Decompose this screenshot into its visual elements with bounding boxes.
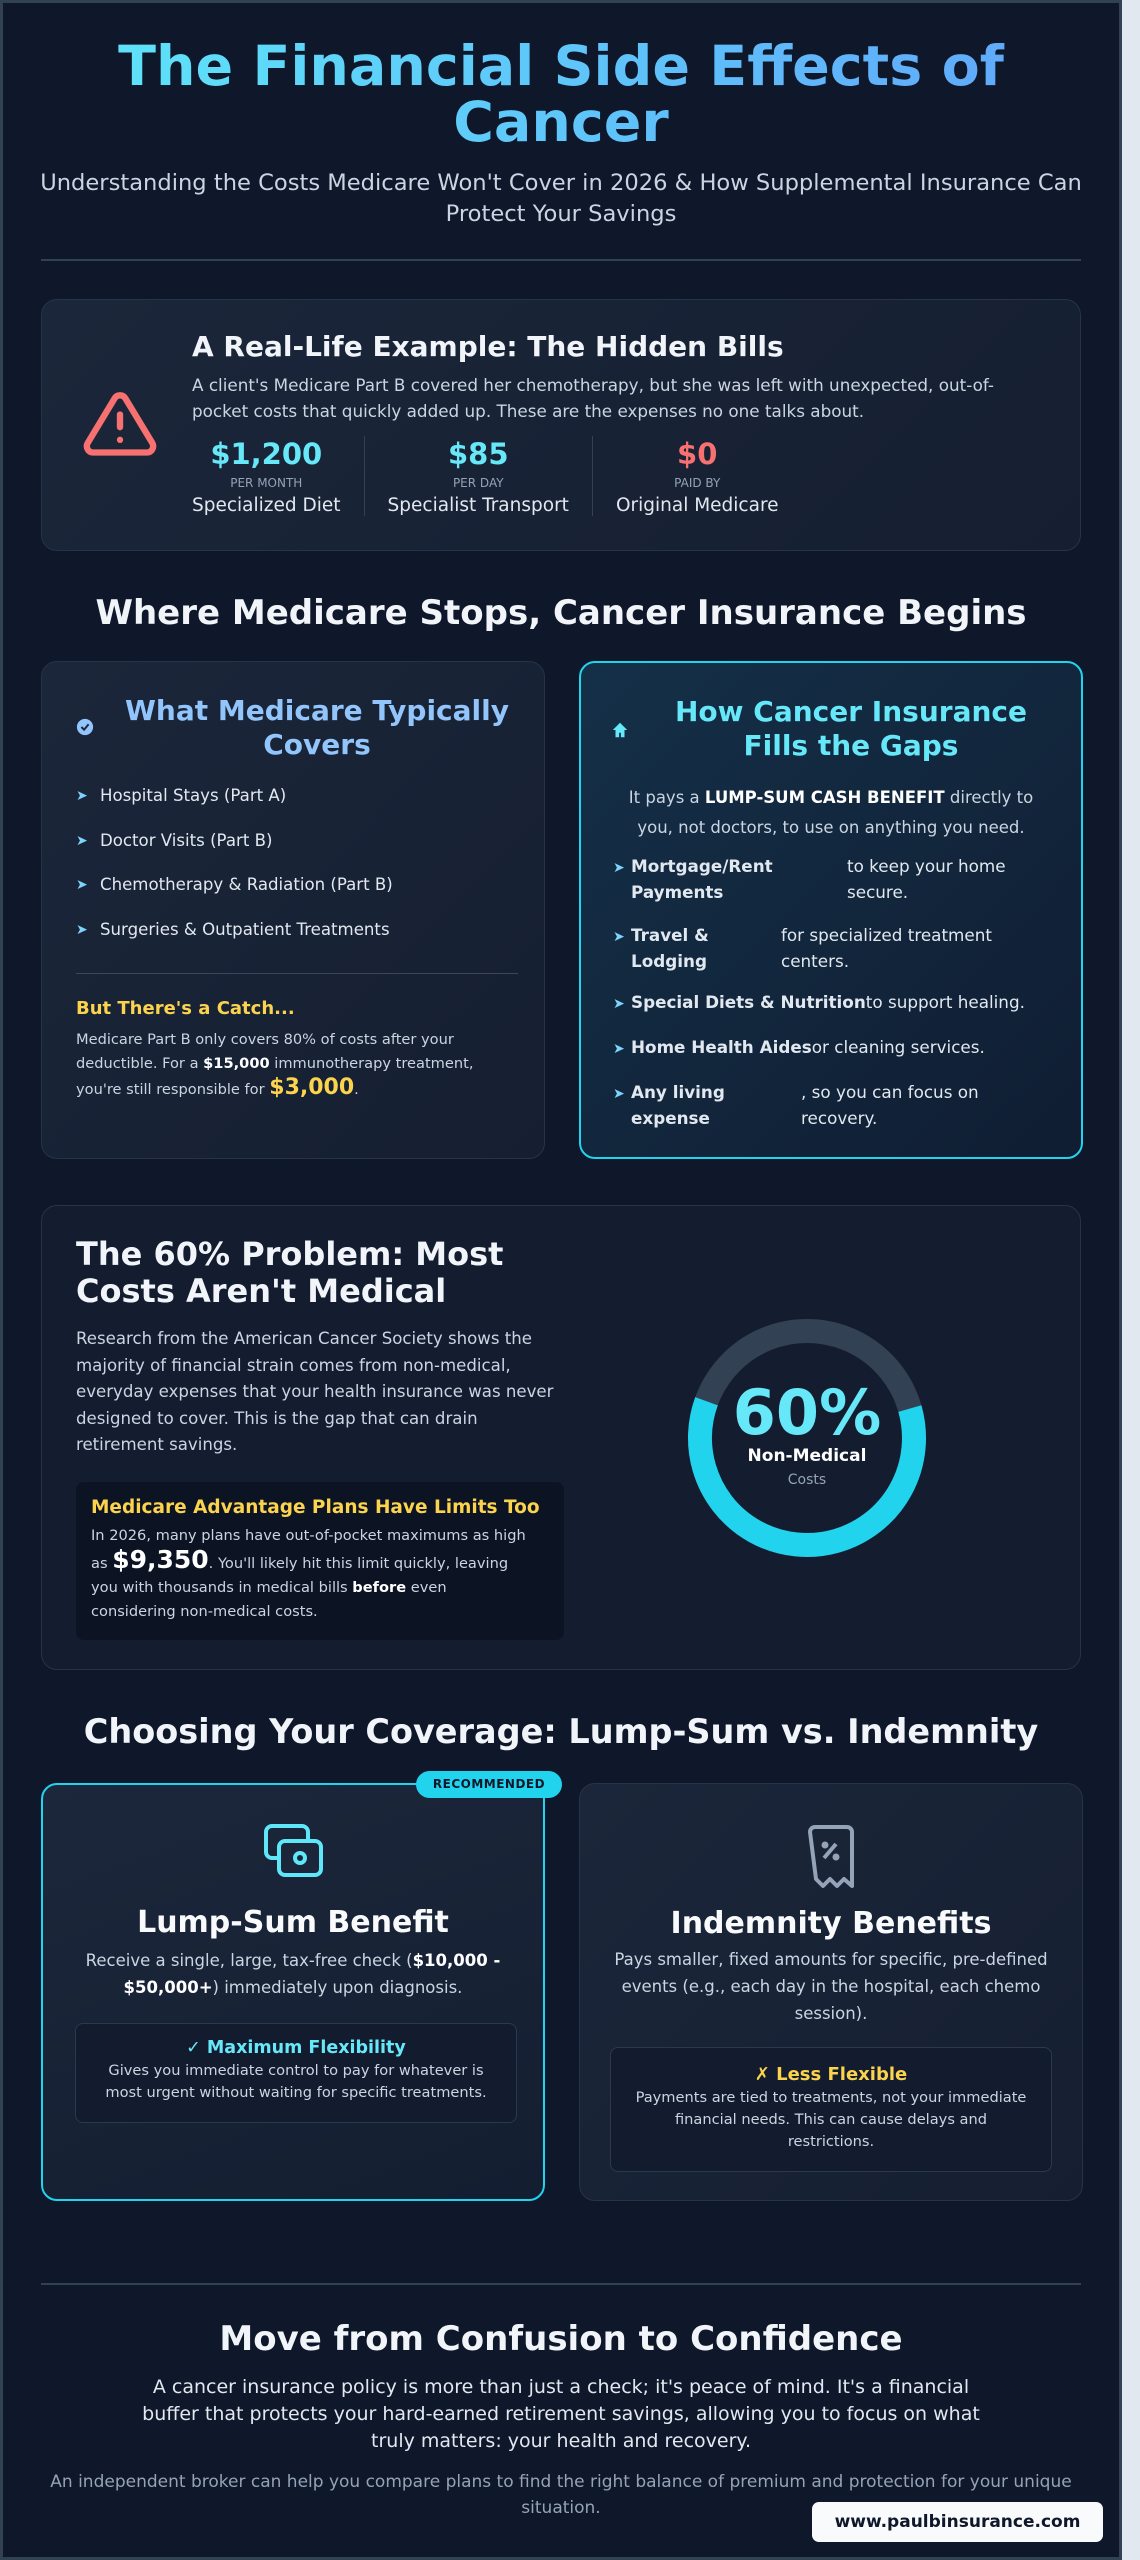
- callout: less flexible: [610, 2047, 1052, 2172]
- list: to keep your home secure.: [847, 856, 1006, 902]
- panel: 60% problem: [41, 1205, 1081, 1670]
- heading: Lump-Sum Benefit: [137, 1905, 449, 1940]
- catch heading: But There's a Catch...: [76, 998, 295, 1019]
- callout: advantage limits: Medicare Advantage Plans Have Limits Too: [91, 1497, 540, 1518]
- donut chart: 60%: [733, 1376, 881, 1449]
- stat: medicare: [592, 436, 802, 516]
- list: Home Health Aides: [631, 1037, 812, 1057]
- stat: diet: Specialized Diet: [192, 495, 341, 516]
- heading: What Medicare Typically Covers: [125, 694, 509, 761]
- panel: cancer insurance: [579, 661, 1083, 1159]
- catch text: Medicare Part B only covers 80% of costs after your deductible. For a $15,000 immunotherapy treatment, you're still responsible for $3,000.: [76, 1031, 473, 1100]
- heading: confidence: Move from Confusion to Confidence: [219, 2319, 903, 2359]
- list: ➤: [76, 877, 88, 893]
- url badge: [812, 2502, 1103, 2542]
- list: [613, 856, 1025, 1128]
- callout: advantage limits: In 2026, many plans have out-of-pocket maximums as high as $9,350. You'll likely hit this limit quickly, leaving you with thousands in medical bills before even considering non-medical costs.: [91, 1527, 526, 1620]
- list: Any living expense: [631, 1082, 725, 1128]
- list: ➤: [76, 833, 88, 849]
- stat: transport: PER DAY: [453, 476, 504, 490]
- list: Doctor Visits (Part B): [100, 831, 272, 850]
- text: Pays smaller, fixed amounts for specific, pre-defined events (e.g., each day in the hospital, each chemo session).: [614, 1950, 1048, 2023]
- list: Chemotherapy & Radiation (Part B): [100, 875, 393, 894]
- list: ➤: [613, 929, 625, 945]
- heading: choosing coverage: Choosing Your Coverage: Lump-Sum vs. Indemnity: [84, 1712, 1038, 1751]
- list: Special Diets & Nutrition: [631, 992, 866, 1012]
- heading: How Cancer Insurance Fills the Gaps: [675, 695, 1027, 762]
- callout: less flexible: Payments are tied to treatments, not your immediate financial needs. This can cause delays and restrictions.: [636, 2089, 1026, 2150]
- list: ➤: [613, 996, 625, 1012]
- icon: receipt: [808, 1825, 854, 1888]
- heading: where medicare stops: Where Medicare Stops, Cancer Insurance Begins: [95, 593, 1027, 633]
- panel: medicare covers: [41, 661, 545, 1159]
- icon: money: [264, 1824, 323, 1877]
- stat: diet: [192, 437, 341, 516]
- list: ➤: [613, 1086, 625, 1102]
- list: ➤: [613, 1041, 625, 1057]
- stat: medicare: Original Medicare: [616, 495, 779, 516]
- stat: medicare: PAID BY: [674, 476, 720, 490]
- callout: advantage limits: [76, 1482, 564, 1640]
- list: Mortgage/Rent Payments: [631, 856, 773, 902]
- list: Surgeries & Outpatient Treatments: [100, 920, 390, 939]
- stat: diet: $1,200: [210, 437, 322, 471]
- intro: It pays a LUMP-SUM CASH BENEFIT directly to you, not doctors, to use on anything you need.: [629, 788, 1033, 837]
- list: for specialized treatment centers.: [781, 925, 992, 971]
- heading: A Real-Life Example: The Hidden Bills: [192, 330, 784, 363]
- list: ➤: [76, 922, 88, 938]
- callout: flexibility: [75, 2023, 517, 2123]
- list: ➤: [76, 788, 88, 804]
- panel: lump-sum: [41, 1783, 545, 2201]
- donut chart: Costs: [788, 1472, 826, 1488]
- text: Research from the American Cancer Society shows the majority of financial strain comes from non-medical, everyday expenses that your health insurance was never designed to cover. This is the gap that can drain retirement savings.: [76, 1329, 553, 1454]
- stat: transport: [364, 436, 592, 516]
- list: to support healing.: [866, 992, 1025, 1012]
- stat: diet: PER MONTH: [230, 476, 302, 490]
- stat: transport: $85: [448, 437, 509, 471]
- text: A client's Medicare Part B covered her chemotherapy, but she was left with unexpected, out-of-pocket costs that quickly added up. These are the expenses no one talks about.: [192, 375, 994, 421]
- list: ➤: [613, 860, 625, 876]
- badge: RECOMMENDED: [433, 1777, 545, 1791]
- text: Receive a single, large, tax-free check ($10,000 - $50,000+) immediately upon diagnosis.: [86, 1951, 500, 1997]
- title: The Financial Side Effects of Cancer: [118, 34, 1004, 155]
- list: Travel & Lodging: [631, 925, 709, 971]
- list: , so you can focus on recovery.: [801, 1082, 979, 1128]
- stat: transport: Specialist Transport: [388, 495, 569, 516]
- icon: house: [612, 722, 628, 738]
- subtitle: Understanding the Costs Medicare Won't Cover in 2026 & How Supplemental Insurance Can Protect Your Savings: [40, 170, 1082, 227]
- panel: indemnity: [579, 1783, 1083, 2201]
- stat: medicare: $0: [677, 437, 717, 471]
- donut chart: [688, 1319, 926, 1557]
- heading: Indemnity Benefits: [671, 1906, 991, 1941]
- closing text: A cancer insurance policy is more than just a check; it's peace of mind. It's a financial buffer that protects your hard-earned retirement savings, allowing you to focus on what truly matters: your health and recovery.: [142, 2376, 980, 2452]
- callout: flexibility: Gives you immediate control to pay for whatever is most urgent without waiting for specific treatments.: [105, 2062, 487, 2101]
- list: or cleaning services.: [812, 1037, 985, 1057]
- stats: [192, 436, 779, 516]
- list: [76, 786, 393, 939]
- callout: flexibility: ✓ Maximum Flexibility: [186, 2038, 406, 2058]
- badge: [416, 1771, 562, 1798]
- list: Hospital Stays (Part A): [100, 786, 286, 805]
- icon: check: [76, 718, 94, 736]
- callout: less flexible: ✗ Less Flexible: [755, 2064, 907, 2085]
- panel: real-life example: [41, 299, 1081, 551]
- url badge: www.paulbinsurance.com: [835, 2512, 1080, 2532]
- broker note: An independent broker can help you compare plans to find the right balance of premium and protection for your unique situation.: [50, 2472, 1072, 2518]
- icon: warning: [84, 392, 156, 456]
- donut chart: Non-Medical: [748, 1446, 866, 1466]
- heading: The 60% Problem: Most Costs Aren't Medical: [76, 1235, 503, 1310]
